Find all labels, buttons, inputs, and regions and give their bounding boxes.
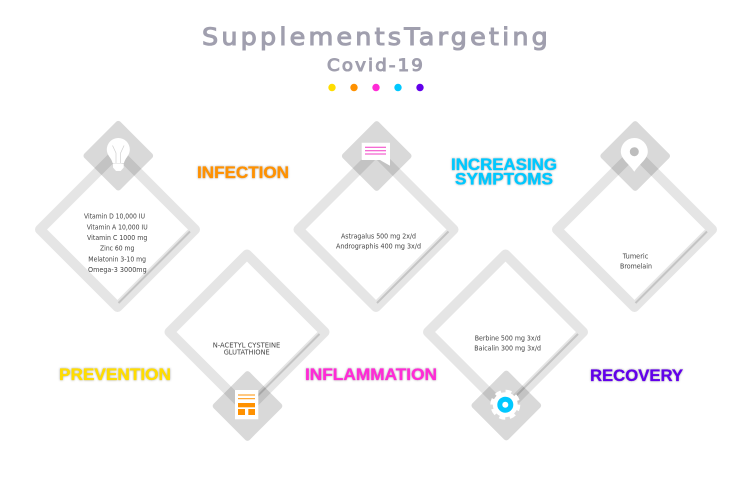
- supplement list: increasing symptoms: [620, 253, 652, 270]
- heading: recovery: RECOVERY: [590, 366, 684, 385]
- panel: increasing symptoms supplements: [557, 152, 712, 307]
- supplement list: increasing symptoms: Tumeric: [622, 253, 649, 261]
- supplement list: inflammation: N-ACETYL CYSTEINE: [213, 342, 280, 350]
- supplement list: prevention: Omega-3 3000mg: [88, 266, 147, 274]
- supplement list: increasing symptoms: Bromelain: [620, 262, 652, 270]
- panel: recovery supplements: [428, 254, 583, 410]
- panel: infection supplements: [298, 152, 454, 307]
- heading: infection: INFECTION: [197, 163, 289, 182]
- supplement list: recovery: [474, 335, 541, 352]
- supplement list: prevention: Melatonin 3-10 mg: [88, 256, 146, 264]
- heading: inflammation: INFLAMMATION: [305, 365, 437, 384]
- supplement list: prevention: Vitamin A 10,000 IU: [87, 224, 148, 232]
- icon: light bulb badge: [82, 120, 154, 192]
- supplement list: prevention: [84, 213, 148, 274]
- supplement list: prevention: Zinc 60 mg: [100, 244, 134, 252]
- heading: prevention: PREVENTION: [59, 365, 171, 384]
- panel: inflammation supplements: [170, 254, 324, 410]
- supplement list: prevention: Vitamin D 10,000 IU: [84, 213, 145, 221]
- legend dots: [328, 84, 424, 91]
- title: SupplementsTargeting: [202, 23, 551, 51]
- panel: prevention supplements: [40, 152, 195, 307]
- heading: increasing symptoms: [451, 155, 557, 188]
- supplement list: infection: [336, 233, 421, 251]
- supplement list: inflammation: [213, 342, 280, 357]
- icon: gear badge: [470, 369, 542, 442]
- heading: increasing symptoms: SYMPTOMS: [455, 170, 553, 188]
- icon: document badge: [211, 370, 284, 442]
- supplement list: inflammation: GLUTATHIONE: [224, 349, 270, 357]
- supplement list: prevention: Vitamin C 1000 mg: [87, 234, 147, 242]
- title: Covid-19: [327, 56, 425, 76]
- supplement list: recovery: Baicalin 300 mg 3x/d: [474, 344, 541, 352]
- title: [202, 23, 551, 76]
- supplement list: recovery: Berbine 500 mg 3x/d: [475, 335, 541, 343]
- icon: map pin badge: [599, 120, 671, 192]
- supplement list: infection: Astragalus 500 mg 2x/d: [341, 233, 416, 241]
- supplement list: infection: Andrographis 400 mg 3x/d: [336, 243, 421, 251]
- icon: speech bubble badge: [341, 120, 413, 192]
- heading: increasing symptoms: INCREASING: [451, 155, 557, 174]
